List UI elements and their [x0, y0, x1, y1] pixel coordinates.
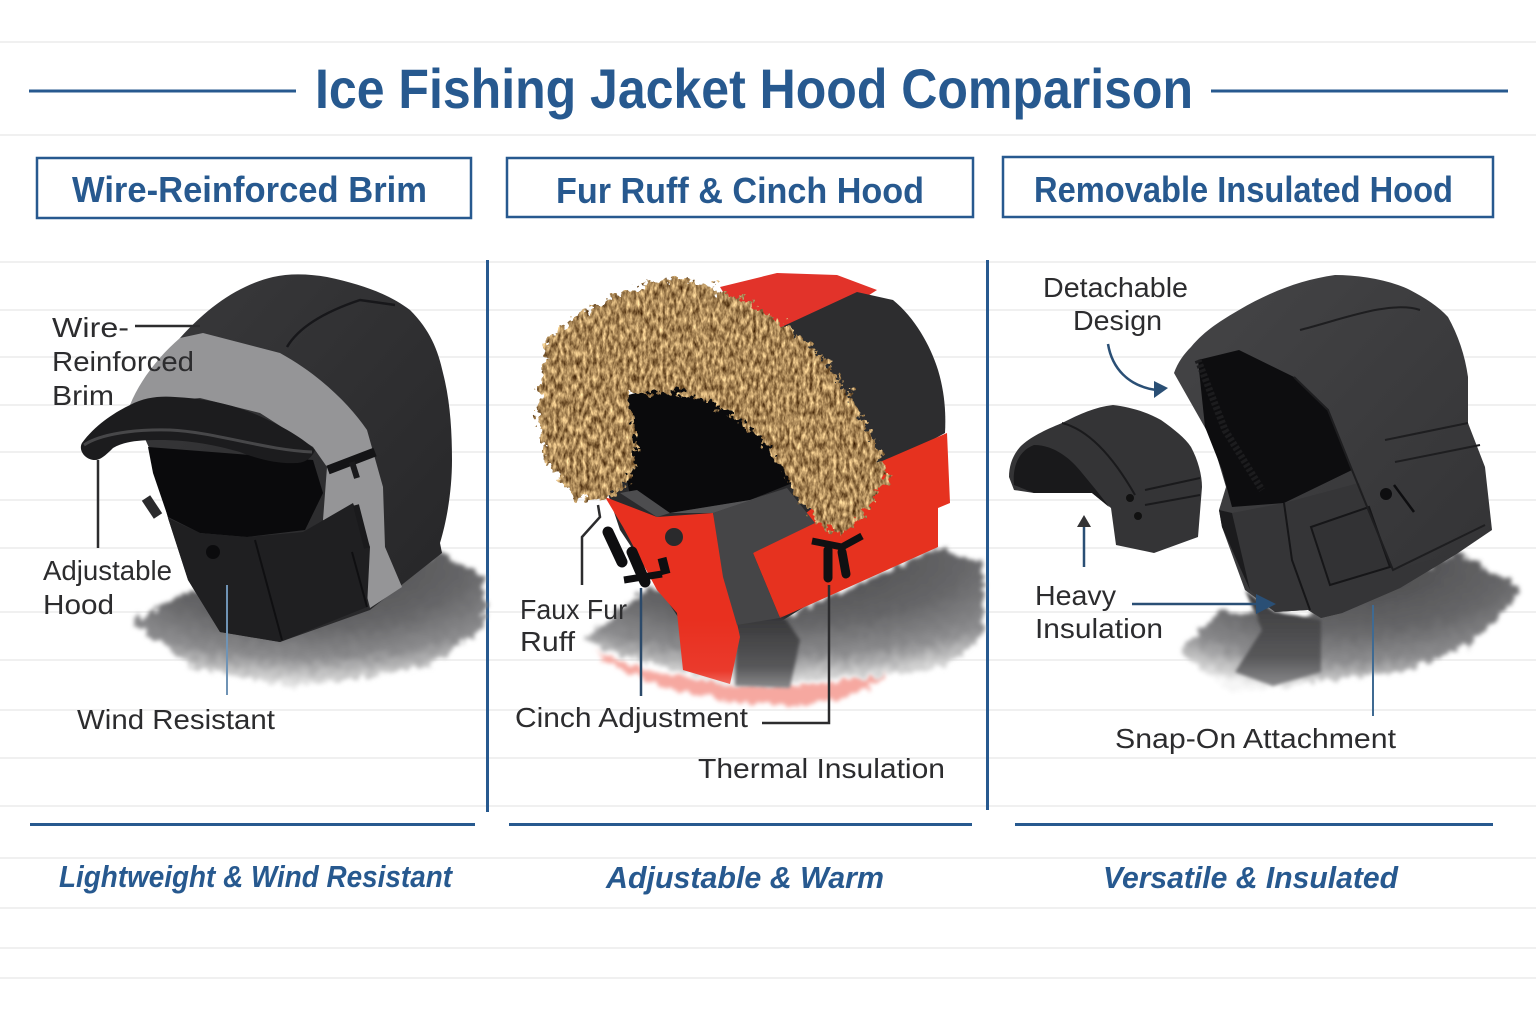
label: heavy insulation: [1035, 515, 1276, 644]
panel heading: wire-reinforced brim: Wire-Reinforced Brim: [72, 169, 427, 210]
label: heavy insulation: Insulation: [1035, 613, 1163, 644]
label: wind resistant: Wind Resistant: [77, 704, 275, 735]
panel heading: removable insulated hood: [1003, 157, 1493, 217]
label: snap-on attachment: Snap-On Attachment: [1115, 723, 1396, 754]
panel heading: wire-reinforced brim: [37, 158, 471, 218]
footer: versatile and insulated: Versatile & Insulated: [1103, 860, 1399, 895]
illustration: wire-reinforced hood: [81, 274, 484, 688]
footer: lightweight and wind resistant: [30, 823, 475, 894]
panel heading: fur ruff and cinch hood: Fur Ruff & Cinch Hood: [556, 170, 924, 211]
label: faux fur ruff: [520, 505, 627, 657]
label: cinch adjustment: Cinch Adjustment: [515, 702, 748, 733]
footer: lightweight and wind resistant: Lightweight & Wind Resistant: [59, 859, 454, 894]
column divider right: [986, 260, 989, 810]
footer: adjustable and warm: [509, 823, 972, 895]
label: adjustable hood: Adjustable: [43, 555, 172, 586]
label: wire-reinforced brim: [52, 312, 200, 411]
label: wire-reinforced brim: Reinforced: [52, 346, 194, 377]
label: detachable design: Design: [1073, 305, 1162, 336]
label: adjustable hood: Hood: [43, 589, 114, 620]
label: detachable design: [1043, 272, 1188, 398]
column divider left: [486, 260, 489, 812]
illustration: fur ruff hood: [537, 273, 983, 705]
title: Ice Fishing Jacket Hood Comparison: [315, 57, 1193, 120]
label: adjustable hood: [43, 460, 172, 620]
panel heading: fur ruff and cinch hood: [507, 158, 973, 217]
label: faux fur ruff: Ruff: [520, 626, 575, 657]
illustration: removable insulated hood: [1174, 275, 1523, 692]
label: cinch adjustment: [515, 585, 829, 733]
label: faux fur ruff: Faux Fur: [520, 594, 627, 625]
label: thermal insulation: Thermal Insulation: [698, 753, 945, 784]
footer: adjustable and warm: Adjustable & Warm: [605, 860, 884, 895]
footer: versatile and insulated: [1015, 823, 1493, 895]
label: wire-reinforced brim: Brim: [52, 380, 114, 411]
label: heavy insulation: Heavy: [1035, 580, 1116, 611]
label: detachable design: Detachable: [1043, 272, 1188, 303]
illustration: detached hood piece: [1009, 405, 1202, 553]
panel heading: removable insulated hood: Removable Insulated Hood: [1034, 169, 1453, 210]
label: wire-reinforced brim: Wire-: [52, 312, 129, 343]
